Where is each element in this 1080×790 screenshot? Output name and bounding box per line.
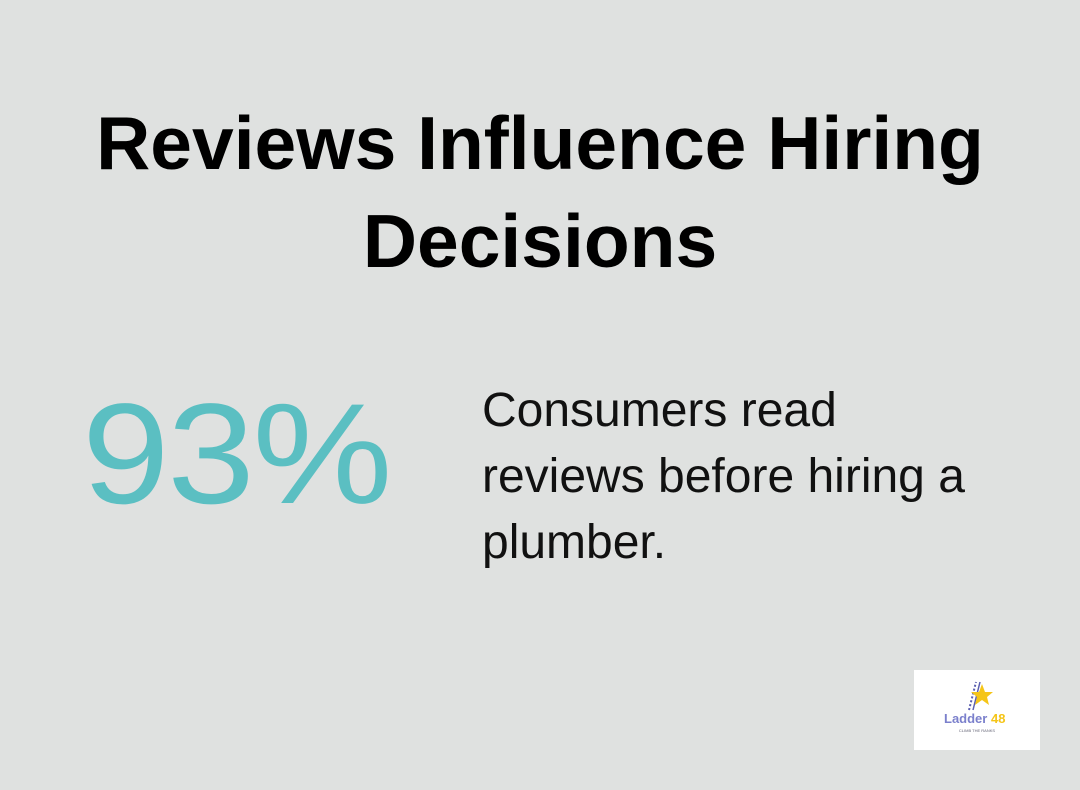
icon: ladder star: Ladder 48 [944,711,1005,726]
stat description: plumber. [482,516,666,569]
title [96,101,984,283]
stat description: Consumers read [482,384,837,437]
title: Reviews Influence Hiring [96,101,984,185]
stat description: reviews before hiring a [482,450,965,503]
icon: ladder star: CLIMB THE RANKS [959,728,995,733]
stat description [482,384,965,569]
logo: Ladder 48 [914,670,1040,750]
title: Decisions [363,199,717,283]
stat number: 93% [82,375,390,534]
icon: ladder star [944,682,1006,733]
